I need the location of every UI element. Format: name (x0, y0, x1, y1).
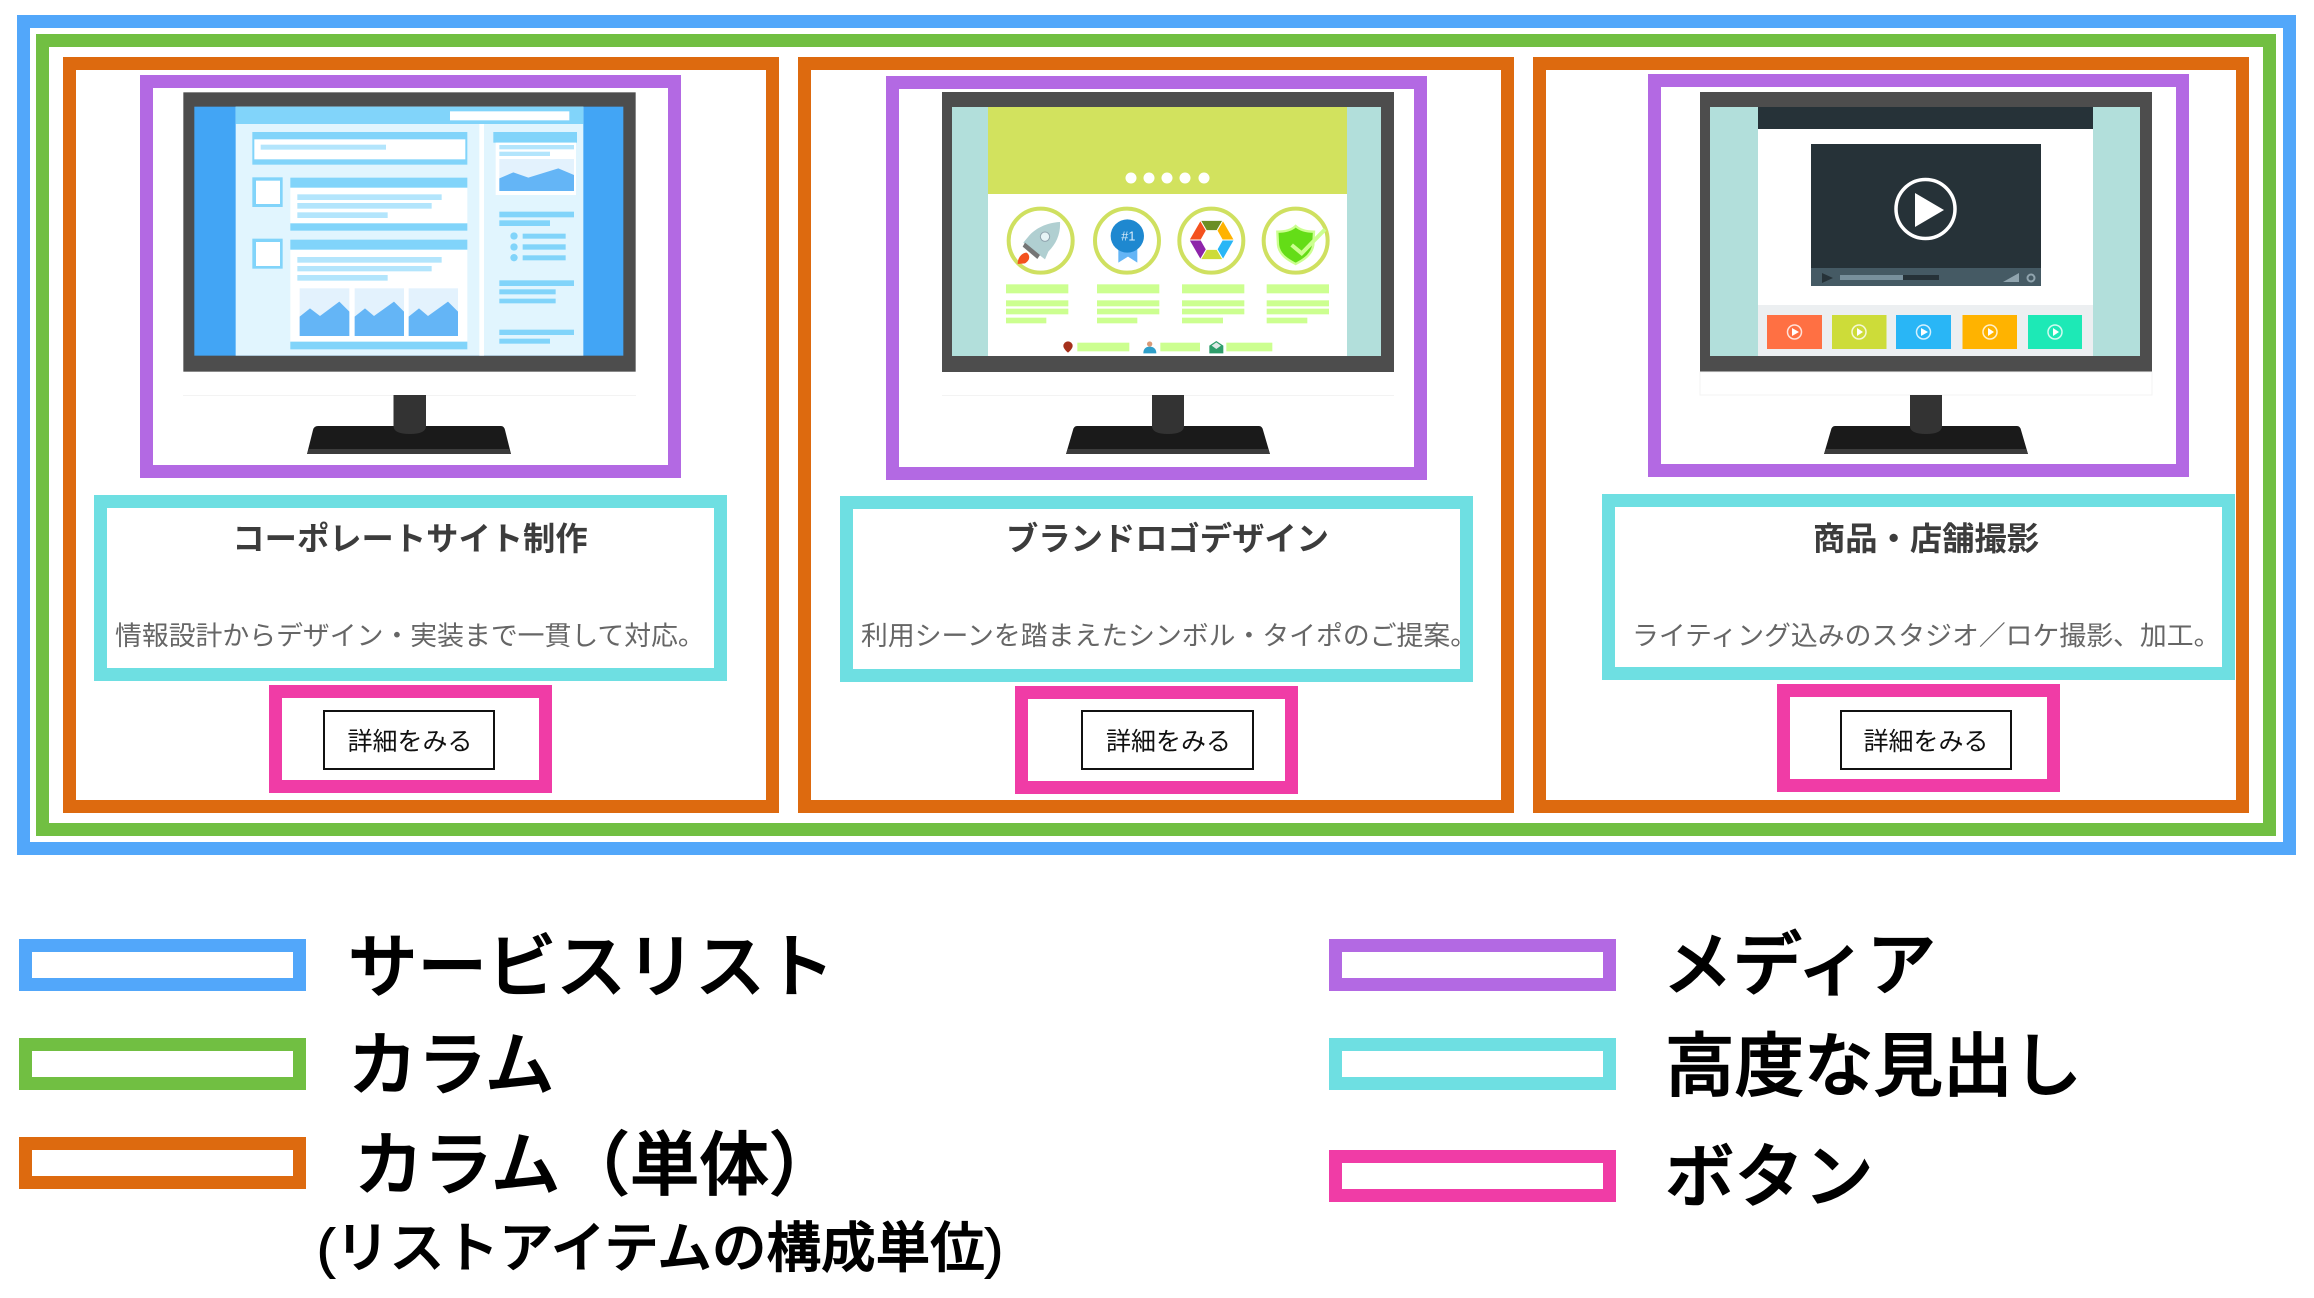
legend: single column: (リストアイテムの構成単位) (317, 1218, 1003, 1279)
panel: column 1 corporate site (70, 64, 772, 806)
legend: service list: サービスリスト (348, 928, 834, 1006)
legend: columns (26, 1026, 554, 1104)
heading: product and store photography: 商品・店舗撮影 (1813, 521, 2039, 557)
button: details (276, 692, 546, 786)
legend: media: メディア (1663, 926, 1936, 1004)
media: monitor with website wireframe (146, 82, 674, 472)
legend: columns: カラム (348, 1026, 554, 1104)
legend: button: ボタン (1665, 1138, 1874, 1216)
panel: column 2 brand logo design (804, 64, 1508, 806)
heading: brand logo design: 利用シーンを踏まえたシンボル・タイポのご提案。 (861, 621, 1477, 651)
heading: product and store photography (1608, 500, 2228, 674)
button: details (1784, 690, 2054, 786)
button: details: 詳細をみる (1863, 728, 1989, 756)
media: monitor with landing page (892, 82, 1420, 474)
legend: advanced heading: 高度な見出し (1665, 1027, 2082, 1105)
legend: single column: カラム（単体） (354, 1126, 838, 1204)
heading: corporate site: 情報設計からデザイン・実装まで一貫して対応。 (115, 621, 705, 651)
button: details (1022, 692, 1292, 788)
panel: columns (green outline) (42, 40, 2270, 830)
panel: service list (blue outline) (24, 22, 2290, 848)
heading: corporate site (100, 502, 720, 674)
legend: media (1336, 926, 1936, 1004)
legend: single column (26, 1126, 1003, 1279)
panel: column 3 product and store photography (1540, 64, 2242, 806)
heading: corporate site: コーポレートサイト制作 (232, 521, 588, 557)
button: details: 詳細をみる (347, 728, 473, 756)
heading: product and store photography: ライティング込みのスタジオ／ロケ撮影、加工。 (1632, 621, 2220, 651)
heading: brand logo design (846, 502, 1477, 676)
media: monitor with landing page: #1 (1121, 229, 1135, 243)
legend: service list (26, 928, 834, 1006)
media: monitor with video player (1654, 80, 2182, 470)
heading: brand logo design: ブランドロゴデザイン (1006, 521, 1329, 557)
button: details: 詳細をみる (1106, 728, 1231, 756)
legend: advanced heading (1336, 1027, 2082, 1105)
legend: button (1336, 1138, 1874, 1216)
